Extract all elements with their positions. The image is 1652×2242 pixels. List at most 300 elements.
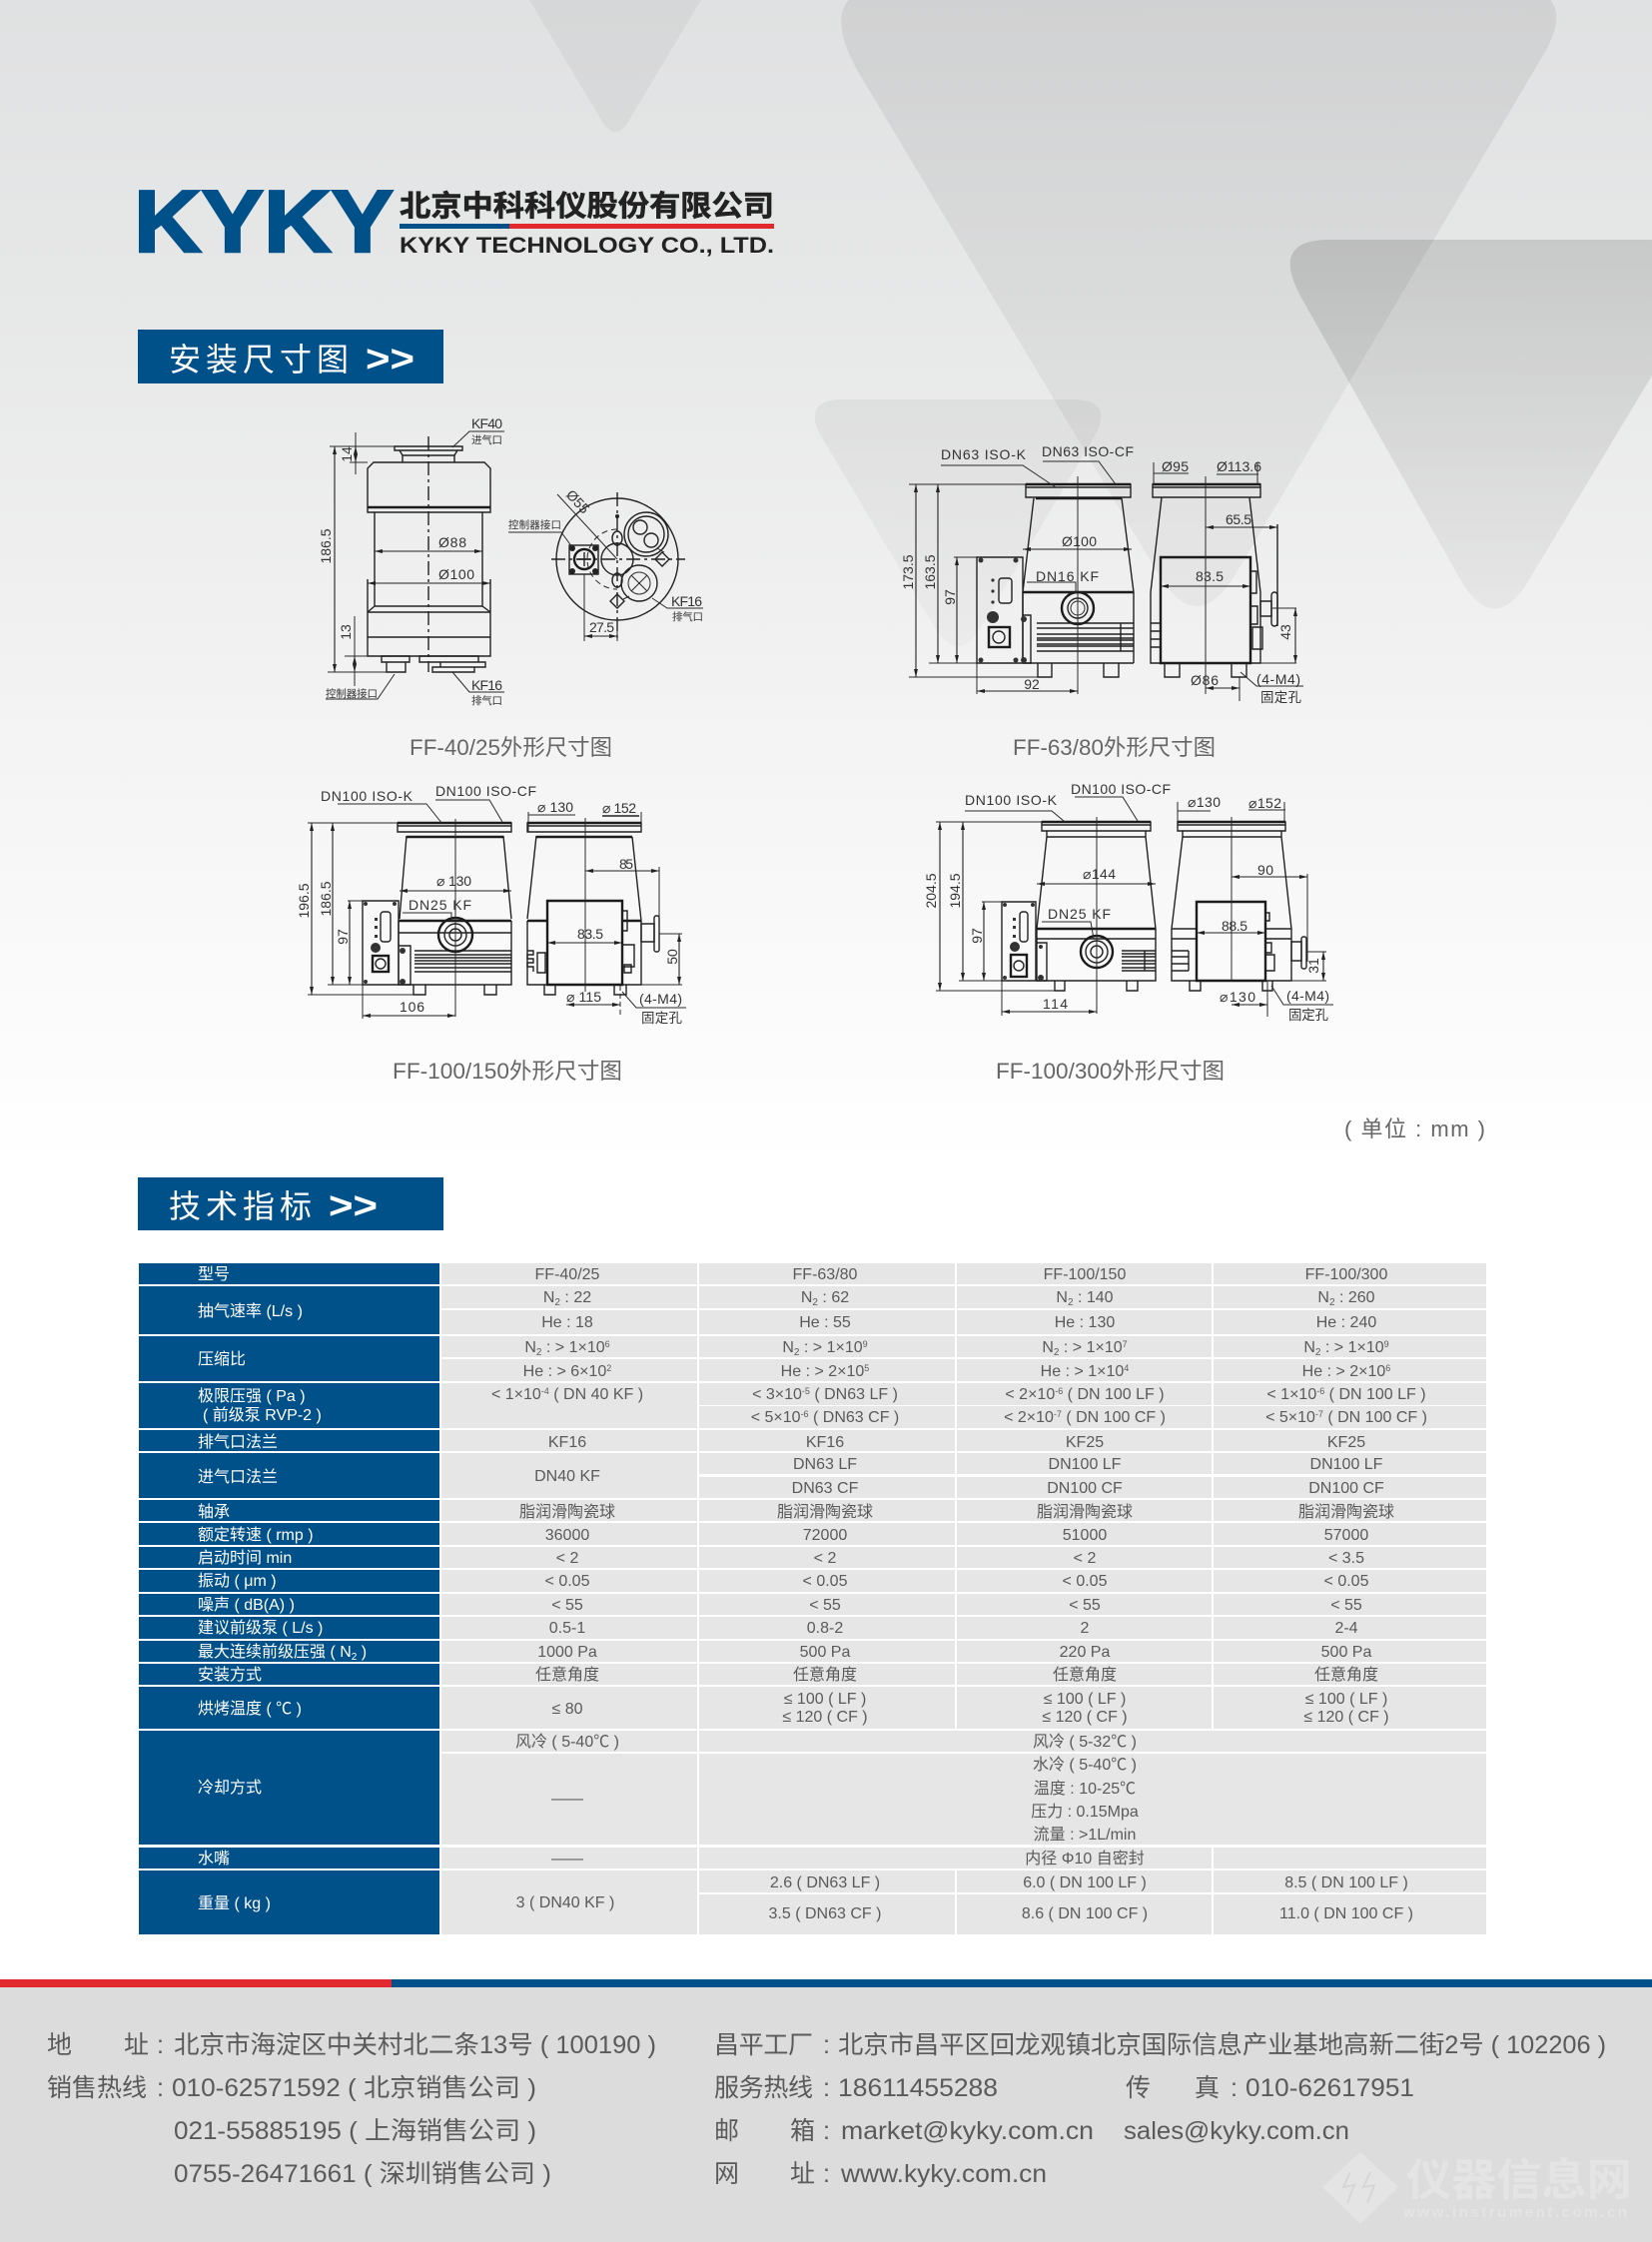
dimensions side view: 50	[664, 949, 680, 965]
callouts front view: DN100 ISO-CF	[435, 783, 536, 799]
row: max continuous backing pressure: 1000 Pa	[537, 1644, 597, 1661]
row: pumping speed: He : 55	[799, 1314, 851, 1331]
row: rated speed: 57000	[1324, 1527, 1368, 1544]
row: max continuous backing pressure: 500 Pa	[1321, 1644, 1371, 1661]
row: pumping speed: : 22	[560, 1289, 591, 1306]
dimensions side view: (4-M4)	[639, 991, 682, 1007]
right contact block: :	[823, 2031, 830, 2059]
dimensions front view	[923, 822, 1156, 1016]
row: mounting: 安装方式	[198, 1666, 262, 1684]
row: inlet flange: DN40 KF	[534, 1468, 600, 1485]
right contact block: :	[823, 2074, 830, 2102]
row: cooling: 水冷 ( 5-40℃ )	[1033, 1756, 1137, 1774]
row: inlet flange: DN100 CF	[1308, 1480, 1384, 1497]
dimensions front view: DN25 KF	[1048, 906, 1111, 922]
right contact block: 18611455288	[838, 2074, 998, 2102]
dimensions front view: 204.5	[923, 873, 939, 909]
row: exhaust flange: KF16	[806, 1434, 844, 1451]
unit note: ( 单位 : mm )	[1344, 1117, 1485, 1141]
front view pump outline	[398, 819, 511, 1017]
row: inlet flange: DN100 LF	[1049, 1456, 1122, 1473]
footer band	[0, 1979, 1652, 2242]
row: bake temperature: ≤ 100 ( LF )	[1044, 1691, 1126, 1708]
row: rated speed: 36000	[545, 1527, 589, 1544]
caption: FF-63/80外形尺寸图	[1013, 735, 1216, 760]
dimension lines side view: Ø100	[438, 566, 474, 582]
dimensions and callouts top view: 排气口	[672, 610, 703, 623]
left contact block	[47, 2031, 656, 2188]
row: bearing: 轴承	[198, 1503, 230, 1521]
row: compression ratio: 2	[1315, 1347, 1321, 1358]
dimensions side view: 83.5	[577, 926, 603, 942]
row: weight: 6.0 ( DN 100 LF )	[1023, 1874, 1147, 1891]
left contact block: 0755-26471661 ( 深圳销售公司 )	[174, 2160, 551, 2188]
left contact block: 地	[47, 2031, 72, 2059]
row: cooling: 冷却方式	[198, 1779, 262, 1797]
row: pumping speed: N	[801, 1289, 812, 1306]
left contact block: :	[157, 2031, 164, 2059]
section heading: specifications	[138, 1177, 443, 1230]
left contact block: 北京市海淀区中关村北二条13号 ( 100190 )	[174, 2031, 656, 2059]
row: max continuous backing pressure: 2	[352, 1652, 358, 1663]
left contact block: 址	[124, 2031, 149, 2059]
row: water nozzle: ——	[551, 1851, 583, 1868]
dimension lines side view: 186.5	[318, 528, 334, 564]
row: cooling: 流量 : >1L/min	[1034, 1826, 1136, 1844]
dimensions side view: 固定孔	[641, 1011, 683, 1026]
side view pump outline	[368, 436, 490, 672]
row: ultimate pressure: ( 前级泵 RVP-2 )	[203, 1406, 322, 1424]
row: start time: < 3.5	[1328, 1550, 1364, 1567]
dimensions front view: 196.5	[296, 883, 312, 919]
row: mounting	[139, 1664, 1486, 1685]
callouts front view	[321, 783, 536, 824]
right contact block: 传	[1126, 2074, 1151, 2102]
dimensions side view: ⌀130	[1220, 989, 1255, 1005]
dimensions and callouts top view	[508, 486, 703, 641]
row: ultimate pressure: -4	[541, 1386, 549, 1396]
callouts side view: 排气口	[471, 694, 502, 707]
dimension lines side view: 14	[339, 446, 355, 462]
row: bake temperature: ≤ 80	[551, 1701, 583, 1718]
row: exhaust flange: KF25	[1066, 1434, 1104, 1451]
caption: FF-40/25外形尺寸图	[410, 735, 612, 760]
dimensions side view: ⌀130	[1188, 794, 1221, 810]
row: cooling: 风冷 ( 5-32℃ )	[1033, 1733, 1137, 1751]
logo: KYKY TECHNOLOGY CO., LTD.	[400, 233, 774, 258]
right contact block: :	[823, 2117, 830, 2145]
row: noise: 噪声 ( dB(A) )	[198, 1596, 295, 1614]
row: max continuous backing pressure: 500 Pa	[800, 1644, 850, 1661]
row: compression ratio: 6	[605, 1339, 610, 1349]
row: ultimate pressure: < 1×10	[1266, 1386, 1316, 1403]
dimensions and callouts top view: 控制器接口	[508, 518, 561, 531]
dimensions front view: 186.5	[318, 881, 334, 917]
callouts front view	[965, 781, 1171, 821]
row: max continuous backing pressure: 220 Pa	[1060, 1644, 1110, 1661]
row: inlet flange: DN100 LF	[1310, 1456, 1383, 1473]
row: inlet flange: 进气口法兰	[198, 1468, 278, 1486]
row: compression ratio: 2	[1054, 1347, 1060, 1358]
row: vibration	[139, 1570, 1486, 1592]
row: ultimate pressure: 极限压强 ( Pa )	[198, 1387, 306, 1405]
row: ultimate pressure: < 2×10	[1005, 1386, 1055, 1403]
row: pumping speed: N	[1317, 1289, 1329, 1306]
row: compression ratio: N	[782, 1339, 794, 1356]
dimensions front view: 163.5	[922, 554, 938, 590]
row: compression ratio: 9	[863, 1339, 868, 1349]
row: model: FF-100/150	[1044, 1266, 1126, 1283]
front view pump outline	[1023, 476, 1134, 694]
row: compression ratio: He : > 6×10	[523, 1363, 606, 1380]
callouts front view: DN100 ISO-K	[965, 792, 1058, 808]
row: model: FF-100/300	[1305, 1266, 1387, 1283]
left contact block: :	[157, 2074, 164, 2102]
section heading: installation dimensions	[138, 330, 443, 383]
callouts side view: 控制器接口	[326, 687, 378, 700]
row: cooling	[139, 1731, 1486, 1845]
row: ultimate pressure: ( DN 40 KF )	[549, 1386, 643, 1403]
caption: FF-100/150外形尺寸图	[393, 1059, 622, 1084]
row: max continuous backing pressure	[139, 1641, 1486, 1663]
watermark	[1322, 2152, 1632, 2224]
section heading: specifications: 技术指标	[169, 1188, 312, 1224]
callouts side view: 进气口	[471, 433, 502, 446]
dimensions side view: 88.5	[1222, 918, 1247, 934]
drawing: FF-100/150	[296, 783, 686, 1084]
row: compression ratio: 2	[606, 1363, 611, 1373]
row: compression ratio: He : > 1×10	[1041, 1363, 1124, 1380]
dimensions side view: 83.5	[1196, 568, 1224, 584]
row: vibration: < 0.05	[1063, 1573, 1108, 1590]
row: ultimate pressure: < 1×10	[491, 1386, 541, 1403]
row: ultimate pressure: -6	[1055, 1386, 1063, 1396]
drawing: FF-100/300	[923, 781, 1333, 1084]
row: water nozzle: 水嘴	[198, 1850, 230, 1868]
row: ultimate pressure: ( DN 100 CF )	[1323, 1409, 1427, 1426]
side view pump outline	[527, 818, 659, 995]
row: noise: < 55	[551, 1597, 583, 1614]
row: bake temperature: ≤ 100 ( LF )	[784, 1691, 866, 1708]
row: compression ratio: : > 1×10	[541, 1339, 605, 1356]
row: start time: 启动时间 min	[198, 1549, 292, 1567]
row: bake temperature: 烘烤温度 ( ℃ )	[198, 1700, 302, 1718]
dimensions front view: 92	[1024, 676, 1040, 692]
controller box	[977, 557, 1031, 663]
row: bake temperature: ≤ 100 ( LF )	[1305, 1691, 1387, 1708]
callouts side view	[326, 415, 504, 707]
logo: KYKY	[134, 172, 394, 271]
right contact block: 邮	[714, 2117, 739, 2145]
row: mounting: 任意角度	[535, 1665, 599, 1684]
dimensions side view: 65.5	[1226, 511, 1251, 527]
row: pumping speed: : 140	[1074, 1289, 1114, 1306]
dimensions side view: Ø86	[1191, 672, 1219, 688]
row: recommended backing pump: 2	[1081, 1620, 1090, 1637]
row: pumping speed: : 260	[1335, 1289, 1375, 1306]
row: compression ratio: 6	[1385, 1363, 1390, 1373]
row: cooling: 温度 : 10-25℃	[1034, 1780, 1136, 1798]
drawing: FF-63/80	[900, 443, 1303, 760]
row: bearing: 脂润滑陶瓷球	[1037, 1503, 1133, 1521]
dimensions side view: 固定孔	[1288, 1008, 1328, 1023]
front view pump outline	[1037, 817, 1156, 1014]
dimensions side view: (4-M4)	[1286, 988, 1329, 1004]
dimensions front view: ⌀ 130	[436, 873, 471, 889]
dimensions side view: ⌀152	[1248, 795, 1281, 811]
row: noise: < 55	[1069, 1597, 1101, 1614]
dimensions and callouts top view: Ø55	[563, 486, 593, 517]
top view	[551, 492, 685, 639]
dimensions side view: 85	[619, 856, 633, 872]
row: ultimate pressure: ( DN 100 LF )	[1063, 1386, 1165, 1403]
row: ultimate pressure: < 5×10	[1265, 1409, 1315, 1426]
row: pumping speed: 2	[554, 1297, 560, 1308]
right contact block: market@kyky.com.cn	[841, 2117, 1094, 2145]
right contact block: 真	[1195, 2074, 1220, 2102]
dimensions front view: 97	[969, 928, 985, 944]
row: start time: < 2	[1074, 1550, 1096, 1567]
row: bearing: 脂润滑陶瓷球	[1298, 1503, 1394, 1521]
row: pumping speed: He : 130	[1055, 1314, 1115, 1331]
dimensions side view: ⌀ 130	[537, 799, 573, 815]
row: weight	[139, 1870, 1486, 1934]
row: weight: 2.6 ( DN63 LF )	[770, 1874, 880, 1891]
callouts front view: DN63 ISO-CF	[1042, 443, 1134, 459]
row: pumping speed: N	[543, 1289, 554, 1306]
row: exhaust flange: 排气口法兰	[198, 1433, 278, 1451]
row: model	[139, 1263, 1486, 1284]
row: compression ratio: 2	[536, 1347, 542, 1358]
row: weight: 重量 ( kg )	[198, 1894, 271, 1912]
row: weight: 3 ( DN40 KF )	[516, 1894, 614, 1911]
row: ultimate pressure: ( DN63 LF )	[810, 1386, 898, 1403]
row: model: FF-40/25	[535, 1266, 600, 1283]
dimensions side view: ⌀ 152	[602, 800, 636, 816]
dimension lines side view: Ø88	[438, 534, 466, 550]
row: pumping speed: 抽气速率 (L/s )	[198, 1302, 303, 1320]
dimensions side view	[1178, 794, 1333, 1023]
side view pump outline	[1172, 817, 1306, 991]
row: pumping speed: N	[1056, 1289, 1068, 1306]
section heading: installation dimensions: 安装尺寸图	[169, 342, 349, 377]
row: compression ratio: 5	[864, 1363, 869, 1373]
row: pumping speed: 2	[812, 1297, 818, 1308]
row: mounting: 任意角度	[793, 1665, 857, 1684]
row: ultimate pressure: ( DN63 CF )	[809, 1409, 899, 1426]
dimensions front view: 194.5	[947, 873, 963, 909]
row: ultimate pressure: < 2×10	[1004, 1409, 1054, 1426]
dimensions side view: Ø113.6	[1217, 458, 1261, 474]
row: bake temperature	[139, 1687, 1486, 1729]
row: bearing: 脂润滑陶瓷球	[519, 1503, 615, 1521]
callouts side view: KF16	[471, 677, 502, 693]
row: weight: 8.5 ( DN 100 LF )	[1284, 1874, 1408, 1891]
row: start time: < 2	[814, 1550, 836, 1567]
dimension lines side view	[318, 432, 490, 686]
row: cooling: ——	[551, 1791, 583, 1808]
row: max continuous backing pressure: )	[357, 1644, 367, 1661]
row: ultimate pressure: -5	[802, 1386, 810, 1396]
row: vibration: < 0.05	[545, 1573, 590, 1590]
right contact block: www.kyky.com.cn	[840, 2160, 1047, 2188]
row: mounting: 任意角度	[1314, 1665, 1378, 1684]
row: cooling: 风冷 ( 5-40℃ )	[515, 1733, 619, 1751]
dimensions front view: 114	[1043, 996, 1068, 1012]
right contact block	[714, 2031, 1606, 2188]
row: rated speed	[139, 1523, 1486, 1545]
dimensions side view: 固定孔	[1260, 690, 1302, 705]
row: vibration: 振动 ( μm )	[198, 1572, 277, 1590]
dimensions side view: ⌀ 115	[566, 989, 601, 1005]
dimensions side view: 90	[1257, 862, 1273, 878]
dimensions and callouts top view: KF16	[671, 593, 702, 609]
row: compression ratio: He : > 2×10	[781, 1363, 864, 1380]
row: bearing	[139, 1500, 1486, 1521]
row: inlet flange: DN63 LF	[793, 1456, 857, 1473]
row: recommended backing pump	[139, 1617, 1486, 1639]
row: ultimate pressure: < 3×10	[752, 1386, 802, 1403]
row: mounting: 任意角度	[1053, 1665, 1117, 1684]
row: recommended backing pump: 0.5-1	[549, 1620, 585, 1637]
row: ultimate pressure: -7	[1315, 1409, 1323, 1419]
watermark: 仪器信息网	[1406, 2156, 1632, 2205]
row: ultimate pressure: ( DN 100 CF )	[1062, 1409, 1166, 1426]
dimension lines side view: 13	[338, 624, 354, 640]
row: compression ratio: 7	[1123, 1339, 1128, 1349]
left contact block: 销售热线	[47, 2074, 147, 2102]
row: inlet flange	[139, 1453, 1486, 1498]
row: noise	[139, 1594, 1486, 1615]
left contact block: 021-55885195 ( 上海销售公司 )	[174, 2117, 536, 2145]
dimensions front view: 173.5	[900, 554, 916, 590]
row: inlet flange: DN63 CF	[792, 1480, 859, 1497]
dimensions side view	[1154, 458, 1303, 705]
row: inlet flange: DN100 CF	[1047, 1480, 1123, 1497]
row: compression ratio	[139, 1336, 1486, 1381]
controller box	[363, 901, 411, 985]
controller box	[1002, 902, 1047, 981]
row: bearing: 脂润滑陶瓷球	[777, 1503, 873, 1521]
row: compression ratio: 9	[1384, 1339, 1389, 1349]
section heading: specifications: >>	[329, 1185, 378, 1227]
row: pumping speed: He : 18	[541, 1314, 593, 1331]
dimensions front view: DN25 KF	[409, 897, 471, 913]
row: exhaust flange: KF16	[548, 1434, 586, 1451]
row: rated speed: 额定转速 ( rmp )	[198, 1526, 314, 1544]
row: vibration: < 0.05	[1324, 1573, 1369, 1590]
right contact block: sales@kyky.com.cn	[1124, 2117, 1349, 2145]
row: bake temperature: ≤ 120 ( CF )	[1303, 1709, 1389, 1726]
right contact block: 网	[714, 2160, 739, 2188]
caption: FF-100/300外形尺寸图	[996, 1059, 1225, 1084]
row: compression ratio: 2	[794, 1347, 800, 1358]
row: compression ratio: 4	[1124, 1363, 1129, 1373]
row: model: FF-63/80	[793, 1266, 858, 1283]
row: model: 型号	[198, 1265, 230, 1283]
row: bake temperature: ≤ 120 ( CF )	[782, 1709, 868, 1726]
row: compression ratio: N	[1042, 1339, 1054, 1356]
row: exhaust flange	[139, 1430, 1486, 1451]
dimensions front view: ⌀144	[1083, 866, 1116, 882]
row: bake temperature: ≤ 120 ( CF )	[1042, 1709, 1128, 1726]
callouts front view: DN100 ISO-K	[321, 788, 413, 804]
row: compression ratio: : > 1×10	[1059, 1339, 1123, 1356]
row: compression ratio: 压缩比	[198, 1350, 246, 1368]
dimensions front view: Ø100	[1062, 533, 1097, 549]
row: start time: < 2	[556, 1550, 578, 1567]
row: recommended backing pump: 0.8-2	[807, 1620, 843, 1637]
dimensions front view: 97	[335, 929, 351, 945]
row: compression ratio: He : > 2×10	[1302, 1363, 1385, 1380]
dimensions front view	[900, 484, 1132, 694]
callouts front view: DN100 ISO-CF	[1071, 781, 1171, 797]
right contact block: 010-62617951	[1245, 2074, 1414, 2102]
row: weight: 8.6 ( DN 100 CF )	[1022, 1905, 1148, 1922]
callouts side view: KF40	[471, 415, 502, 431]
row: compression ratio: : > 1×10	[799, 1339, 863, 1356]
row: ultimate pressure: -6	[1316, 1386, 1324, 1396]
row: start time	[139, 1547, 1486, 1568]
right contact block: 北京市昌平区回龙观镇北京国际信息产业基地高新二街2号 ( 102206 )	[838, 2031, 1606, 2059]
dimensions side view: 31	[1305, 958, 1321, 974]
right contact block: :	[1231, 2074, 1238, 2102]
drawing: FF-40/25	[318, 415, 703, 760]
right contact block: 址	[790, 2160, 815, 2188]
row: ultimate pressure	[139, 1383, 1486, 1428]
right contact block: 服务热线	[714, 2074, 813, 2102]
row: noise: < 55	[1330, 1597, 1362, 1614]
dimensions side view: 43	[1277, 624, 1293, 640]
logo	[134, 172, 774, 271]
row: weight: 11.0 ( DN 100 CF )	[1279, 1905, 1413, 1922]
row: cooling: 压力 : 0.15Mpa	[1031, 1803, 1139, 1821]
right contact block: 昌平工厂	[714, 2031, 813, 2059]
callouts front view: DN63 ISO-K	[941, 446, 1027, 462]
callouts front view	[941, 443, 1134, 487]
row: pumping speed: 2	[1329, 1297, 1335, 1308]
side view pump outline	[1151, 476, 1277, 694]
dimensions side view	[528, 799, 686, 1026]
row: ultimate pressure: -7	[1054, 1409, 1062, 1419]
row: weight: 3.5 ( DN63 CF )	[769, 1905, 881, 1922]
row: max continuous backing pressure: 最大连续前级压强 ( N	[198, 1644, 352, 1661]
row: recommended backing pump: 建议前级泵 ( L/s )	[198, 1619, 323, 1637]
dimensions front view: 106	[400, 999, 424, 1015]
row: rated speed: 72000	[803, 1527, 847, 1544]
row: compression ratio: N	[1303, 1339, 1315, 1356]
specification table	[139, 1263, 1486, 1934]
section heading: installation dimensions: >>	[366, 339, 414, 380]
dimensions side view: Ø95	[1162, 458, 1189, 474]
logo: 北京中科科仪股份有限公司	[400, 190, 774, 223]
row: noise: < 55	[809, 1597, 841, 1614]
row: vibration: < 0.05	[803, 1573, 848, 1590]
row: rated speed: 51000	[1063, 1527, 1107, 1544]
row: pumping speed: 2	[1068, 1297, 1074, 1308]
row: pumping speed	[139, 1286, 1486, 1334]
right contact block: 箱	[790, 2117, 815, 2145]
row: ultimate pressure: ( DN 100 LF )	[1324, 1386, 1426, 1403]
row: ultimate pressure: < 5×10	[751, 1409, 801, 1426]
right contact block: :	[823, 2160, 830, 2188]
row: water nozzle: 内径 Φ10 自密封	[1025, 1850, 1145, 1868]
row: pumping speed: : 62	[818, 1289, 849, 1306]
dimensions side view: (4-M4)	[1256, 671, 1300, 687]
left contact block: 010-62571592 ( 北京销售公司 )	[172, 2074, 536, 2102]
row: exhaust flange: KF25	[1327, 1434, 1365, 1451]
dimensions front view	[296, 823, 511, 1019]
